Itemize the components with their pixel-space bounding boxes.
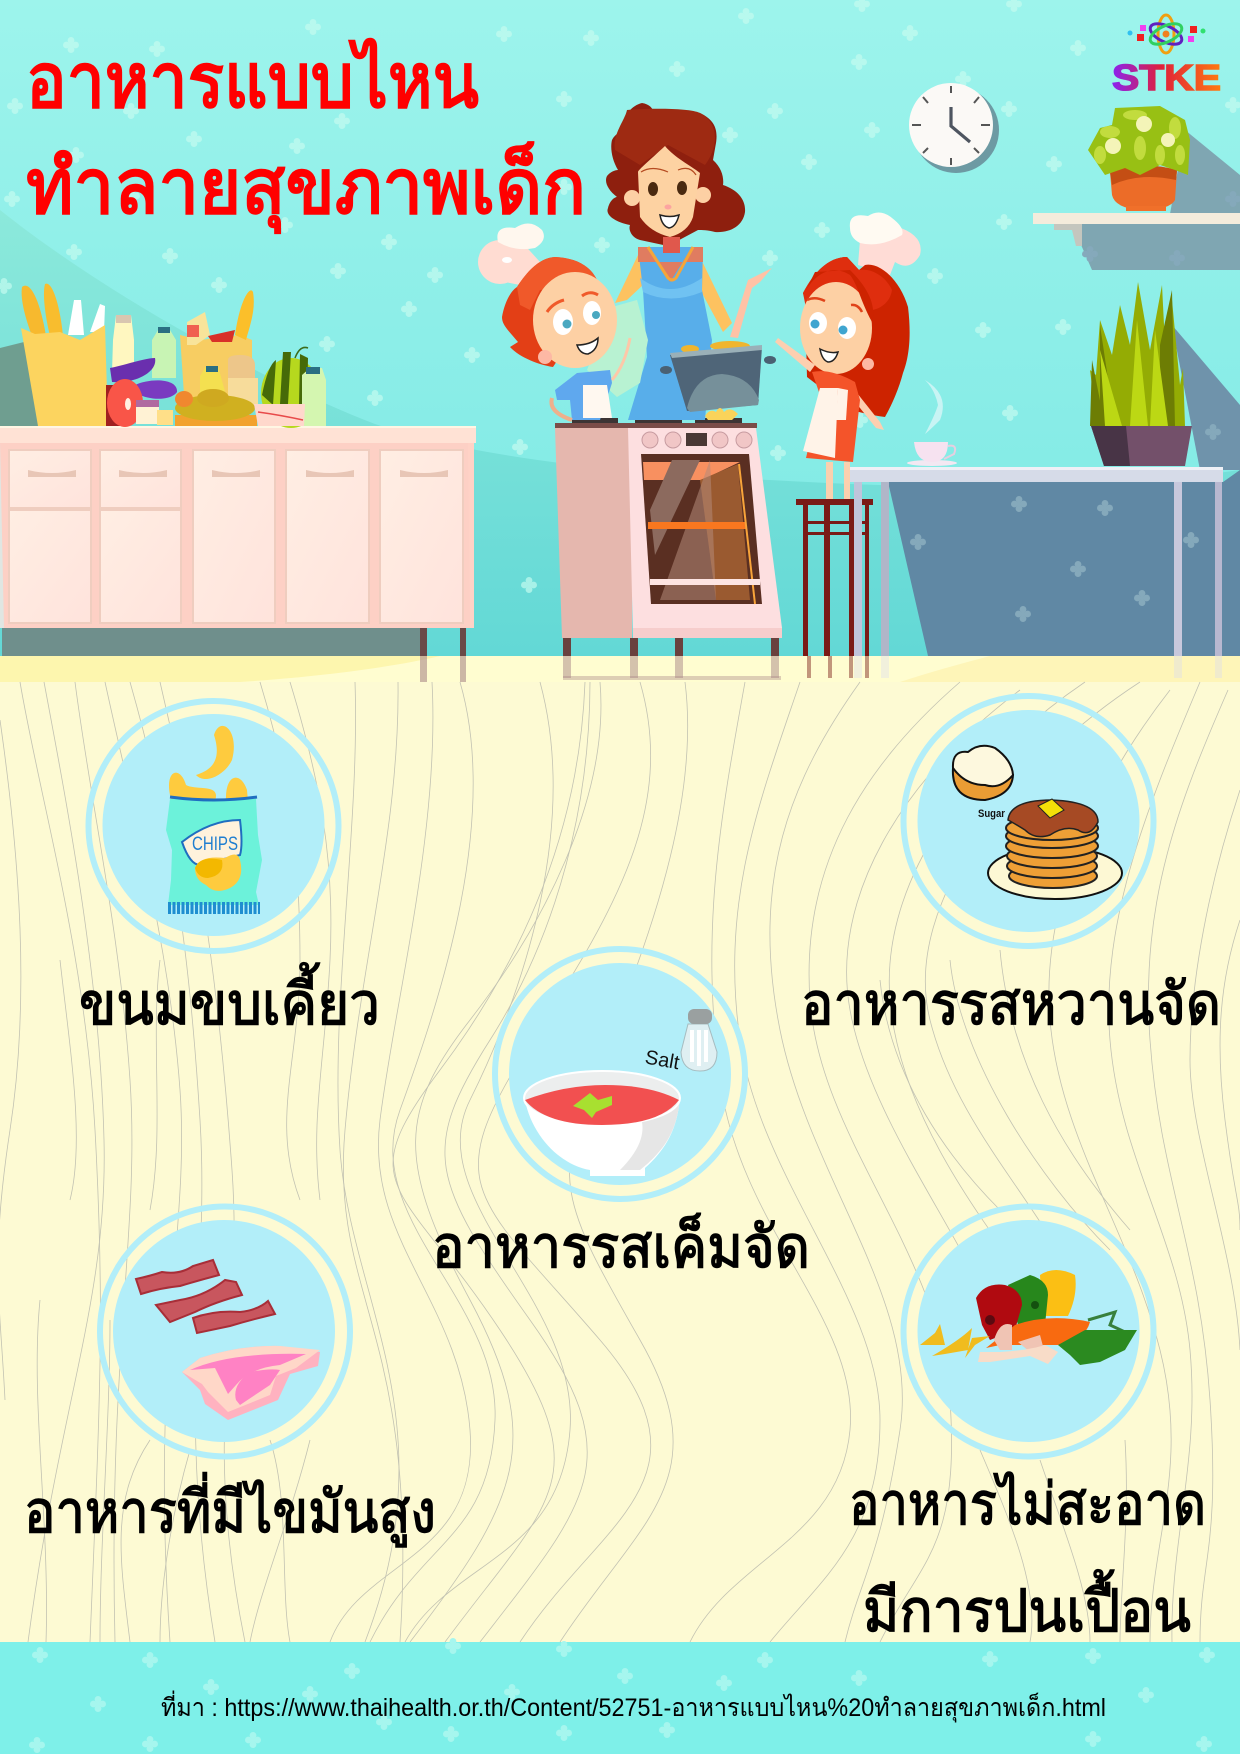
boy — [478, 223, 630, 420]
cabinet — [0, 426, 476, 656]
icon: soup bowl — [524, 1071, 680, 1176]
girl's arms and legs — [775, 338, 815, 372]
mother's dress — [628, 247, 712, 420]
boy's shirt and apron — [555, 370, 612, 420]
table and plant shadows on wall — [888, 130, 1240, 656]
girl's chef hat — [850, 212, 921, 275]
mother's sleeves and arm — [615, 255, 645, 303]
stool — [796, 499, 873, 678]
panel: high fat food — [24, 1206, 436, 1547]
icon: sugar bowl — [953, 746, 1013, 800]
icon: raw steak — [182, 1346, 320, 1420]
icon: salt shaker — [681, 1009, 717, 1071]
title: อาหารแบบไหน — [26, 38, 479, 124]
STKE logo — [1112, 15, 1221, 98]
icon: pancakes on a plate — [988, 799, 1122, 899]
mixing bowl held by boy — [587, 300, 648, 397]
girl's dress and apron — [806, 371, 860, 462]
label: snacks: ขนมขบเคี้ยว — [79, 963, 380, 1037]
panel: salty food — [432, 949, 810, 1280]
cabinet doors — [9, 450, 463, 623]
icon: bag of chips — [166, 726, 262, 908]
boy's chef hat — [478, 223, 544, 285]
icon: rotten vegetables — [920, 1270, 1137, 1365]
panel: sweet food — [801, 696, 1221, 1037]
label: salty food: อาหารรสเค็มจัด — [432, 1213, 810, 1280]
source citation: ที่มา : https://www.thaihealth.or.th/Content/52751-อาหารแบบไหน%20ทำลายสุขภาพเด็ก.html — [161, 1690, 1106, 1723]
mother's hair — [606, 103, 745, 246]
title: ทำลายสุขภาพเด็ก — [26, 142, 586, 233]
icon: bacon strips — [136, 1260, 275, 1333]
stove legs — [563, 638, 779, 656]
label: high fat food: อาหารที่มีไขมันสูง — [24, 1472, 436, 1547]
panel: salty food: Salt — [643, 1047, 682, 1074]
STKE logo: STKE — [1112, 57, 1221, 98]
panel: contaminated food — [849, 1206, 1206, 1644]
icon: bag of chips: CHIPS — [192, 834, 238, 855]
pot on the stove — [660, 341, 776, 420]
panel: body cream background — [0, 682, 1240, 1642]
floor band — [0, 656, 1240, 682]
panel: footer — [0, 1638, 1240, 1754]
contour line pattern — [0, 682, 1240, 1642]
wallpaper pattern — [0, 0, 1240, 593]
panel: sweet food: Sugar — [978, 808, 1006, 820]
mother — [606, 103, 772, 420]
stove and oven — [420, 418, 782, 682]
label: sweet food: อาหารรสหวานจัด — [801, 972, 1221, 1037]
oven knobs — [642, 432, 752, 448]
teacup with steam — [907, 380, 957, 466]
label: contaminated food: มีการปนเปื้อน — [863, 1570, 1191, 1644]
table — [850, 467, 1223, 678]
girl — [775, 212, 921, 499]
shelf — [1033, 213, 1240, 246]
flower plant — [1088, 106, 1190, 211]
panel: kitchen scene background — [0, 0, 1240, 660]
cabinet handles — [28, 470, 448, 477]
title — [26, 38, 586, 233]
label: contaminated food — [849, 1471, 1206, 1644]
wall clock — [909, 83, 999, 173]
girl's hair — [803, 257, 910, 417]
potted fern — [1090, 282, 1192, 466]
panel: snacks — [79, 701, 380, 1037]
oven window — [641, 454, 762, 604]
groceries on counter — [21, 284, 326, 428]
boy's hair — [502, 257, 603, 367]
logo atom icon — [1128, 15, 1206, 53]
